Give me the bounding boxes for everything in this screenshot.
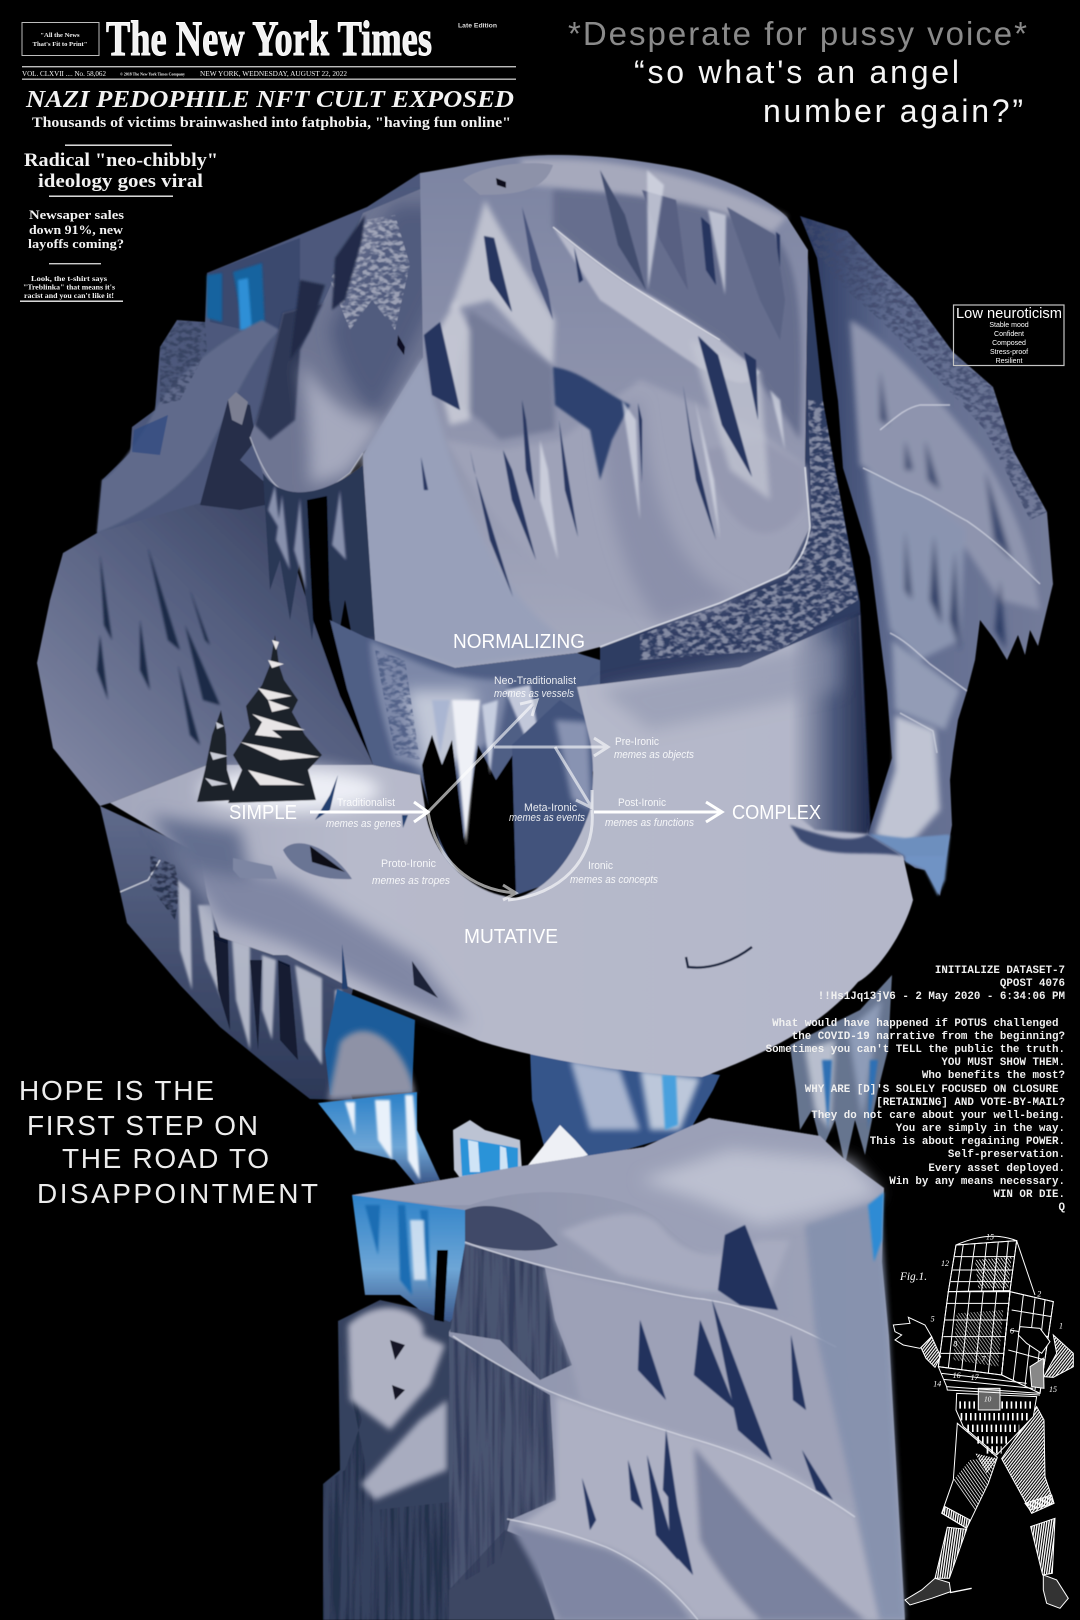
reference numbers: 7 bbox=[982, 1355, 987, 1364]
dimple at crown bbox=[463, 163, 553, 195]
label: proto-ironic: Proto-Ironic bbox=[381, 858, 436, 870]
qpost text block: Who benefits the most? bbox=[922, 1070, 1065, 1082]
qpost text block: YOU MUST SHOW THEM. bbox=[941, 1057, 1065, 1069]
qpost text block bbox=[766, 965, 1065, 1214]
upper cage with head bbox=[948, 1236, 1035, 1295]
column story: newspaper sales: layoffs coming? bbox=[28, 237, 124, 251]
main headline: NAZI PEDOPHILE NFT CULT EXPOSED bbox=[25, 86, 514, 113]
reference numbers: 14 bbox=[933, 1380, 941, 1389]
label: ironic bbox=[570, 860, 658, 886]
pillar base, left rock column bbox=[323, 1300, 470, 1620]
arrow: curve to ironic bbox=[428, 812, 516, 900]
quote line two: number again?” bbox=[763, 93, 1023, 129]
label: pre-ironic: Pre-Ironic bbox=[615, 736, 659, 748]
masthead wordmark: The New York Times bbox=[106, 10, 432, 66]
left slogan: DISAPPOINTMENT bbox=[37, 1178, 318, 1209]
dateline bar: © 2018 The New York Times Company bbox=[120, 72, 185, 76]
small smile crack bbox=[686, 947, 752, 968]
label: meta-ironic bbox=[509, 802, 585, 824]
arrow: to neo-traditionalist bbox=[428, 700, 537, 812]
dateline bar bbox=[22, 66, 516, 80]
qpost text block: You are simply in the way. bbox=[896, 1123, 1065, 1135]
dome main body bbox=[363, 155, 810, 668]
left slogan: HOPE IS THE bbox=[19, 1075, 214, 1106]
label: pre-ironic bbox=[614, 736, 694, 761]
low neuroticism box: Resilient bbox=[996, 358, 1022, 365]
column story: t-shirt bbox=[20, 274, 123, 302]
pillar main bbox=[352, 1118, 905, 1620]
light slope streaks bbox=[540, 170, 785, 560]
label: proto-ironic: memes as tropes bbox=[372, 875, 450, 887]
low neuroticism box: Low neuroticism bbox=[956, 305, 1062, 322]
column story: neo-chibbly bbox=[24, 144, 218, 197]
label: ironic: memes as concepts bbox=[570, 874, 658, 886]
black slit bbox=[307, 496, 373, 758]
pale blue ice right edge of pillar bbox=[805, 1200, 905, 1620]
small dark wedge bbox=[412, 961, 438, 998]
left slogan: THE ROAD TO bbox=[62, 1143, 269, 1174]
label: complex: COMPLEX bbox=[732, 802, 821, 824]
pillar top snow bbox=[352, 1118, 884, 1253]
reference numbers: 2 bbox=[1037, 1290, 1041, 1299]
ice column highlight bbox=[555, 720, 592, 810]
figure label: Fig.1. bbox=[899, 1271, 927, 1283]
arrow: curve to meta-ironic bbox=[508, 810, 592, 900]
qpost text block: This is about regaining POWER. bbox=[870, 1136, 1065, 1148]
label: simple: SIMPLE bbox=[229, 802, 297, 824]
snow lump bbox=[328, 1031, 415, 1100]
label: post-ironic bbox=[605, 797, 694, 829]
low neuroticism box: Confident bbox=[994, 331, 1024, 338]
blue pendant icicles left bbox=[318, 1092, 440, 1184]
qpost text block: Every asset deployed. bbox=[928, 1163, 1065, 1175]
column story: newspaper sales: Newsaper sales bbox=[29, 208, 124, 222]
column story: neo-chibbly: ideology goes viral bbox=[38, 171, 203, 192]
label: ironic: Ironic bbox=[588, 860, 613, 872]
trousers bbox=[942, 1407, 1054, 1528]
arrow: post-ironic to complex bbox=[594, 802, 722, 822]
column story: newspaper sales: down 91%, new bbox=[29, 223, 123, 237]
snow peak on top bbox=[528, 1125, 588, 1170]
qpost text block: Sometimes you can't TELL the public the truth. bbox=[766, 1044, 1065, 1056]
column rock texture bbox=[640, 400, 858, 660]
stockings bbox=[935, 1518, 1055, 1578]
reference numbers: 6 bbox=[1010, 1326, 1014, 1335]
blue ice face on pillar left bbox=[352, 1190, 470, 1322]
sub headline: Thousands of victims brainwashed into fatphobia, "having fun online" bbox=[32, 115, 511, 131]
label: meta-ironic: memes as events bbox=[509, 812, 585, 824]
low neuroticism box: Composed bbox=[992, 340, 1026, 347]
bright blue right corner bbox=[868, 1192, 884, 1262]
label: neo-traditionalist: Neo-Traditionalist bbox=[494, 675, 576, 687]
left terrace with blue ice block bbox=[97, 173, 440, 533]
ridge highlight line bbox=[553, 227, 720, 340]
ice cube on top bbox=[453, 1120, 522, 1178]
reference numbers: 12 bbox=[941, 1259, 949, 1268]
qpost text block: They do not care about your well-being. bbox=[811, 1110, 1065, 1122]
shoes bbox=[905, 1575, 1068, 1608]
ice pendants under the floor, left bbox=[100, 806, 353, 1100]
meme diagram bbox=[229, 631, 821, 948]
label: normalizing: NORMALIZING bbox=[453, 631, 585, 653]
ear box: motto: "All the News bbox=[40, 32, 80, 39]
lower cage bbox=[938, 1292, 1053, 1395]
snowy fir tree large bbox=[228, 635, 322, 803]
floor eye crevice bbox=[233, 843, 352, 879]
top right quote bbox=[568, 15, 1027, 129]
dateline bar: VOL. CLXVII .... No. 58,062 bbox=[22, 69, 106, 78]
dark crevasse streaks bbox=[421, 170, 785, 597]
label: traditionalist: memes as genes bbox=[326, 818, 401, 830]
bowl rim edge bbox=[600, 467, 810, 647]
blue window behind pendants bbox=[325, 989, 415, 1095]
label: neo-traditionalist: memes as vessels bbox=[494, 688, 574, 700]
slope rock streaks bbox=[97, 548, 220, 745]
wave crest lines bbox=[453, 1242, 855, 1620]
floor shading bbox=[150, 612, 948, 1025]
column story: t-shirt: "Treblinka" that means it's bbox=[23, 282, 115, 292]
column story: t-shirt: racist and you can't like it! bbox=[24, 291, 114, 300]
qpost text block: What would have happened if POTUS challenged bbox=[772, 1018, 1058, 1030]
hanging icicles under shoulder bbox=[263, 465, 375, 668]
label: proto-ironic bbox=[372, 858, 450, 887]
qpost text block: Q bbox=[1058, 1202, 1065, 1214]
pendant bright streaks bbox=[345, 1095, 420, 1180]
dome shaded folds bbox=[363, 159, 810, 668]
quote line one: “so what's an angel bbox=[634, 54, 959, 90]
qpost text block: WHY ARE [D]'S SOLELY FOCUSED ON CLOSURE bbox=[805, 1084, 1059, 1096]
column story: neo-chibbly: Radical "neo-chibbly" bbox=[24, 150, 218, 171]
left slope of snow and shadow bbox=[37, 485, 373, 806]
reference numbers: 15 bbox=[1049, 1385, 1057, 1394]
blue slit in floor bbox=[315, 775, 408, 989]
label: post-ironic: Post-Ironic bbox=[618, 797, 666, 809]
qpost text block: !!Hs1Jq13jV6 - 2 May 2020 - 6:34:06 PM bbox=[818, 991, 1065, 1003]
qpost text block: Self-preservation. bbox=[948, 1149, 1065, 1161]
newspaper masthead and headlines bbox=[20, 10, 516, 302]
small fir tree bbox=[197, 710, 236, 802]
lit wave folds on the pillar bbox=[510, 1214, 880, 1620]
snow floor bbox=[110, 615, 913, 1077]
ear box: motto bbox=[22, 22, 99, 56]
arrow: to meta-ironic bbox=[555, 747, 592, 808]
qpost text block: Win by any means necessary. bbox=[889, 1176, 1065, 1188]
hollow blue cave in dome bbox=[553, 367, 630, 480]
snow top speckles bbox=[640, 1150, 880, 1225]
reference numbers: 16 bbox=[953, 1371, 961, 1380]
qpost text block: the COVID-19 narrative from the beginning? bbox=[792, 1031, 1065, 1043]
arrow: simple to traditionalist bbox=[310, 802, 428, 822]
qpost text block: QPOST 4076 bbox=[1000, 978, 1065, 990]
reference numbers: 1 bbox=[1059, 1321, 1063, 1330]
low neuroticism box: Stress-proof bbox=[990, 349, 1028, 356]
ear box: motto: That's Fit to Print" bbox=[33, 41, 87, 48]
label: meta-ironic: Meta-Ironic bbox=[524, 802, 577, 814]
dark crevasses on pillar bbox=[582, 1225, 833, 1575]
column story: t-shirt: Look, the t-shirt says bbox=[31, 274, 107, 283]
arrow: to pre-ironic bbox=[494, 738, 608, 756]
blue ice column right of void bbox=[512, 700, 595, 895]
left slogan bbox=[19, 1075, 318, 1209]
low neuroticism box: Stable mood bbox=[989, 322, 1029, 329]
reference numbers bbox=[931, 1232, 1063, 1394]
tunic of scales: 10 bbox=[984, 1395, 992, 1404]
reference numbers: 8 bbox=[953, 1340, 957, 1349]
qpost text block: WIN OR DIE. bbox=[993, 1189, 1065, 1201]
shoulder shading bbox=[250, 205, 470, 497]
reference numbers: 15 bbox=[986, 1232, 994, 1241]
engraving: man wearing a cage bbox=[893, 1232, 1073, 1608]
reference numbers: 5 bbox=[931, 1314, 935, 1323]
central icicle wall above the void bbox=[330, 620, 600, 885]
tunic of scales bbox=[956, 1388, 1037, 1455]
column story: newspaper sales bbox=[28, 208, 124, 264]
qpost text block: INITIALIZE DATASET-7 bbox=[935, 965, 1065, 977]
reference numbers: 17 bbox=[971, 1373, 980, 1382]
pillar dark fold panels bbox=[449, 1206, 572, 1620]
label: traditionalist bbox=[326, 797, 401, 830]
dateline bar: NEW YORK, WEDNESDAY, AUGUST 22, 2022 bbox=[200, 69, 347, 78]
label: mutative: MUTATIVE bbox=[464, 926, 558, 948]
right hanging icicles bbox=[790, 975, 892, 1165]
arms and hands bbox=[893, 1317, 1073, 1377]
low neuroticism box bbox=[954, 305, 1064, 366]
rocky peak bbox=[200, 392, 290, 510]
grey aside: *Desperate for pussy voice* bbox=[568, 15, 1027, 52]
long white icicles bbox=[432, 685, 545, 845]
label: pre-ironic: memes as objects bbox=[614, 749, 694, 761]
label: neo-traditionalist bbox=[494, 675, 576, 700]
qpost text block: [RETAINING] AND VOTE-BY-MAIL? bbox=[876, 1097, 1065, 1109]
rocky ice column between dome and lobe bbox=[600, 258, 870, 834]
right lobe of ice bbox=[800, 216, 1053, 896]
late edition: Late Edition bbox=[458, 22, 497, 30]
central hanging ice bbox=[530, 1050, 720, 1160]
dome left shoulder bbox=[250, 185, 490, 497]
label: post-ironic: memes as functions bbox=[605, 817, 694, 829]
label: traditionalist: Traditionalist bbox=[337, 797, 395, 809]
black void bbox=[422, 735, 516, 900]
left slogan: FIRST STEP ON bbox=[27, 1110, 258, 1141]
